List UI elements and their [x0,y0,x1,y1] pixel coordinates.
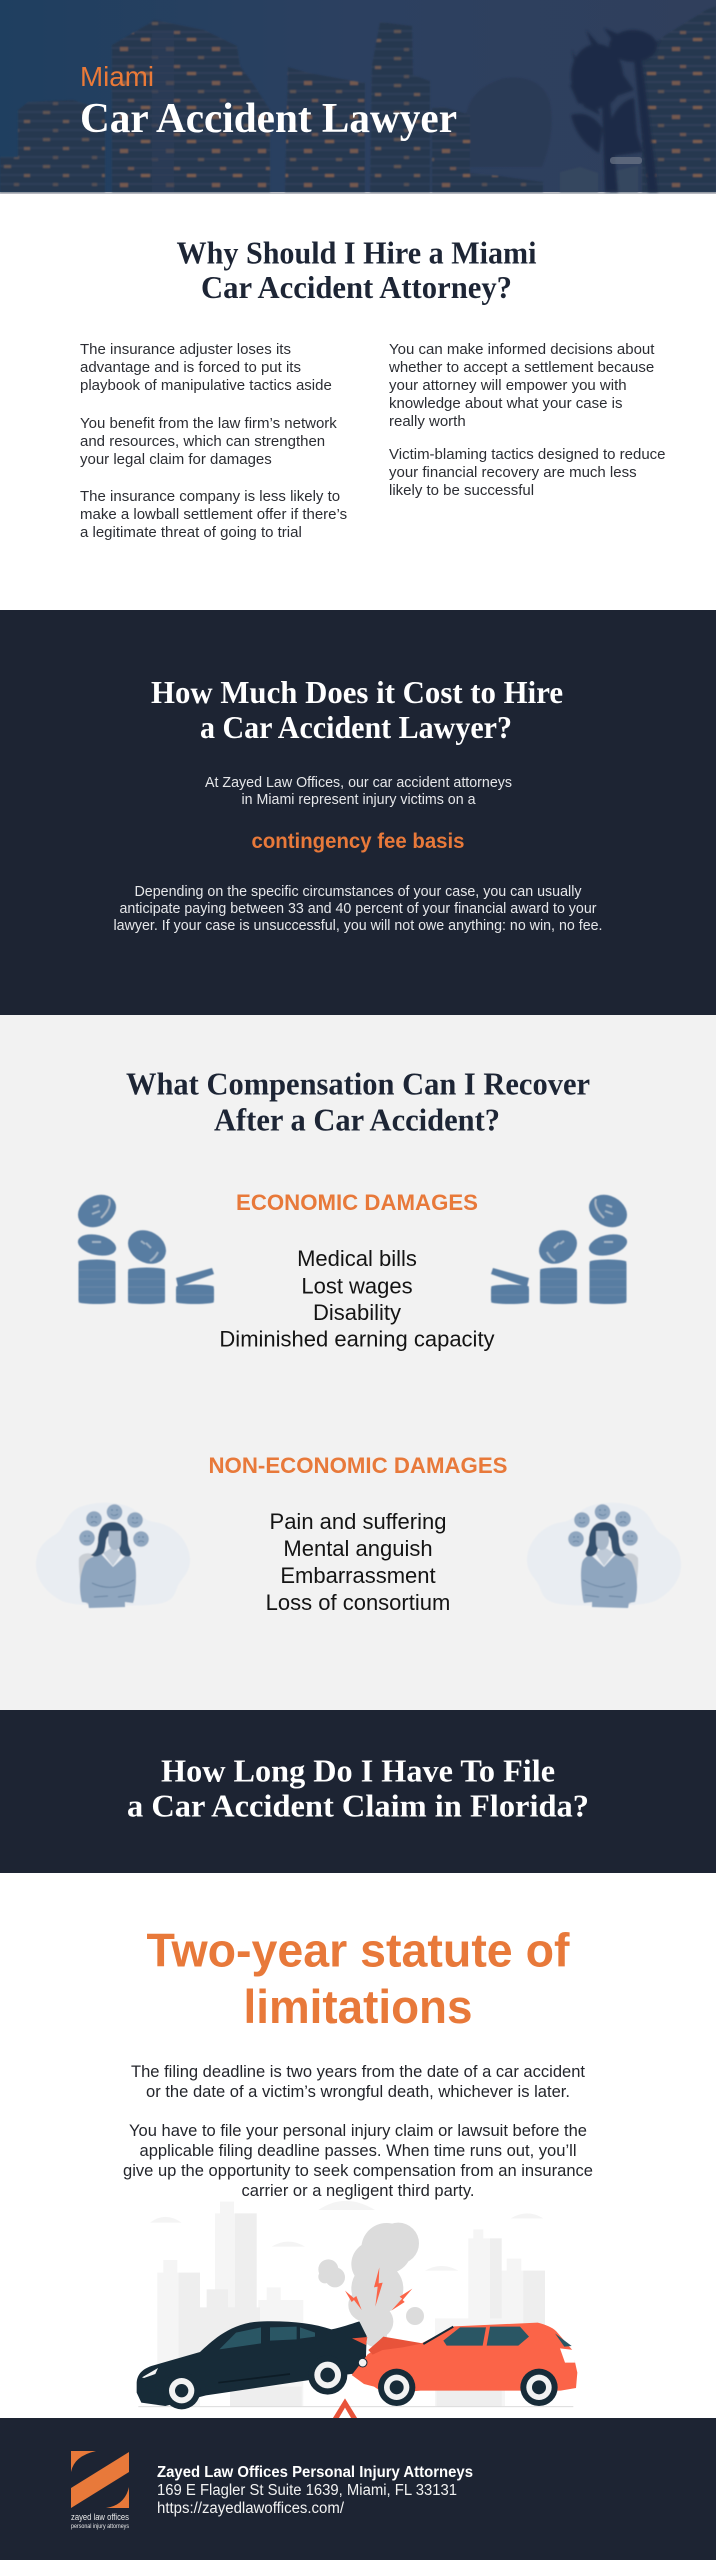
heading: non-economic damages: NON-ECONOMIC DAMAGES [208,1453,507,1478]
deadline text: applicable filing deadline passes. When time runs out, you’ll [140,2142,576,2160]
left column reasons: your legal claim for damages [80,451,272,468]
icon: coin stacks right [491,1188,633,1304]
heading: cost: How Much Does it Cost to Hire [151,674,563,710]
heading: why hire: Car Accident Attorney? [201,269,512,305]
list: non-economic damages: Mental anguish [283,1536,433,1561]
list: economic damages: Disability [313,1300,401,1325]
heading: cost: a Car Accident Lawyer? [200,709,512,745]
footer contact details: Zayed Law Offices Personal Injury Attorneys [157,2464,473,2481]
panel: compensation [0,1015,716,1710]
illustration: car crash [137,2201,577,2419]
list: economic damages: Medical bills [297,1246,417,1271]
deadline text: carrier or a negligent third party. [242,2182,474,2200]
icon: coin stacks left [72,1188,214,1304]
list: non-economic damages [266,1509,450,1615]
logo: Zayed Law Offices [71,2451,129,2530]
city backdrop [138,2201,573,2407]
panel: filing deadline heading [0,1710,716,1873]
heading: economic damages: ECONOMIC DAMAGES [236,1190,478,1215]
title: Car Accident Lawyer: Car Accident Lawyer [80,96,457,142]
red warning triangle [332,2398,358,2419]
smoke [318,2223,424,2347]
right column reasons: likely to be successful [389,482,534,499]
icon: woman with emotions right [527,1503,681,1608]
panel: statute of limitations [0,1873,716,2419]
right column reasons: your financial recovery are much less [389,464,637,481]
deadline text: You have to file your personal injury claim or lawsuit before the [129,2122,587,2140]
right column reasons: whether to accept a settlement because [388,359,654,376]
left column reasons: The insurance company is less likely to [80,488,340,505]
panel: why hire an attorney [0,194,716,610]
subtitle: Miami: Miami [80,61,154,92]
heading: compensation: What Compensation Can I Recover [126,1066,590,1102]
right column reasons: your attorney will empower you with [389,377,627,394]
footer contact details: 169 E Flagler St Suite 1639, Miami, FL 33131 [157,2482,457,2499]
deadline text: give up the opportunity to seek compensation from an insurance [123,2162,593,2180]
footer contact details: https://zayedlawoffices.com/ [157,2500,345,2517]
list: economic damages [219,1246,495,1352]
heading: why hire: Why Should I Hire a Miami [176,234,537,270]
callout: contingency fee basis: contingency fee basis [252,830,464,853]
list: non-economic damages: Embarrassment [280,1563,436,1588]
left column reasons: and resources, which can strengthen [80,433,325,450]
left column reasons: You benefit from the law firm’s network [80,415,337,432]
footer contact details [157,2464,473,2517]
deadline text [123,2063,593,2200]
left column reasons: a legitimate threat of going to trial [80,524,302,541]
heading: compensation: After a Car Accident? [214,1102,500,1138]
left column reasons [80,341,347,541]
list: non-economic damages: Pain and suffering [270,1509,446,1534]
right column reasons: really worth [389,413,466,430]
panel: footer [0,2418,716,2560]
right column reasons: You can make informed decisions about [389,341,655,358]
logo: Zayed Law Offices: personal injury attorneys [71,2524,129,2530]
intro text: At Zayed Law Offices, our car accident attorneys [205,774,512,791]
right column reasons: Victim-blaming tactics designed to reduce [389,446,666,463]
heading: how long: a Car Accident Claim in Florida? [127,1788,589,1824]
logo: Zayed Law Offices: zayed law offices [71,2512,129,2522]
list: non-economic damages: Loss of consortium [266,1590,450,1615]
left column reasons: playbook of manipulative tactics aside [80,377,332,394]
fee explanation: lawyer. If your case is unsuccessful, you will not owe anything: no win, no fee. [114,917,602,934]
fee explanation: Depending on the specific circumstances of your case, you can usually [134,883,582,900]
fee explanation: anticipate paying between 33 and 40 percent of your financial award to your [120,900,596,917]
heading: how long: How Long Do I Have To File [161,1752,555,1788]
list: economic damages: Diminished earning capacity [219,1326,495,1352]
intro text: in Miami represent injury victims on a [242,791,476,808]
lightning bolts [345,2267,412,2311]
right column reasons [388,341,666,499]
deadline text: or the date of a victim’s wrongful death, whichever is later. [146,2083,570,2101]
list: economic damages: Lost wages [301,1274,413,1298]
right column reasons: knowledge about what your case is [389,395,622,412]
city skyline photo [0,6,716,192]
orange car [352,2323,577,2406]
palm trees [570,28,660,192]
dark car [137,2321,367,2409]
left column reasons: The insurance adjuster loses its [80,341,291,358]
headline: two-year statute: limitations [244,1980,472,2033]
header banner [0,0,716,194]
icon: woman with emotions left [36,1503,190,1608]
left column reasons: make a lowball settlement offer if there’s [80,506,347,523]
left column reasons: advantage and is forced to put its [80,359,301,376]
panel: cost of a lawyer [0,610,716,1015]
deadline text: The filing deadline is two years from the date of a car accident [131,2063,585,2081]
headline: two-year statute: Two-year statute of [146,1924,570,1976]
